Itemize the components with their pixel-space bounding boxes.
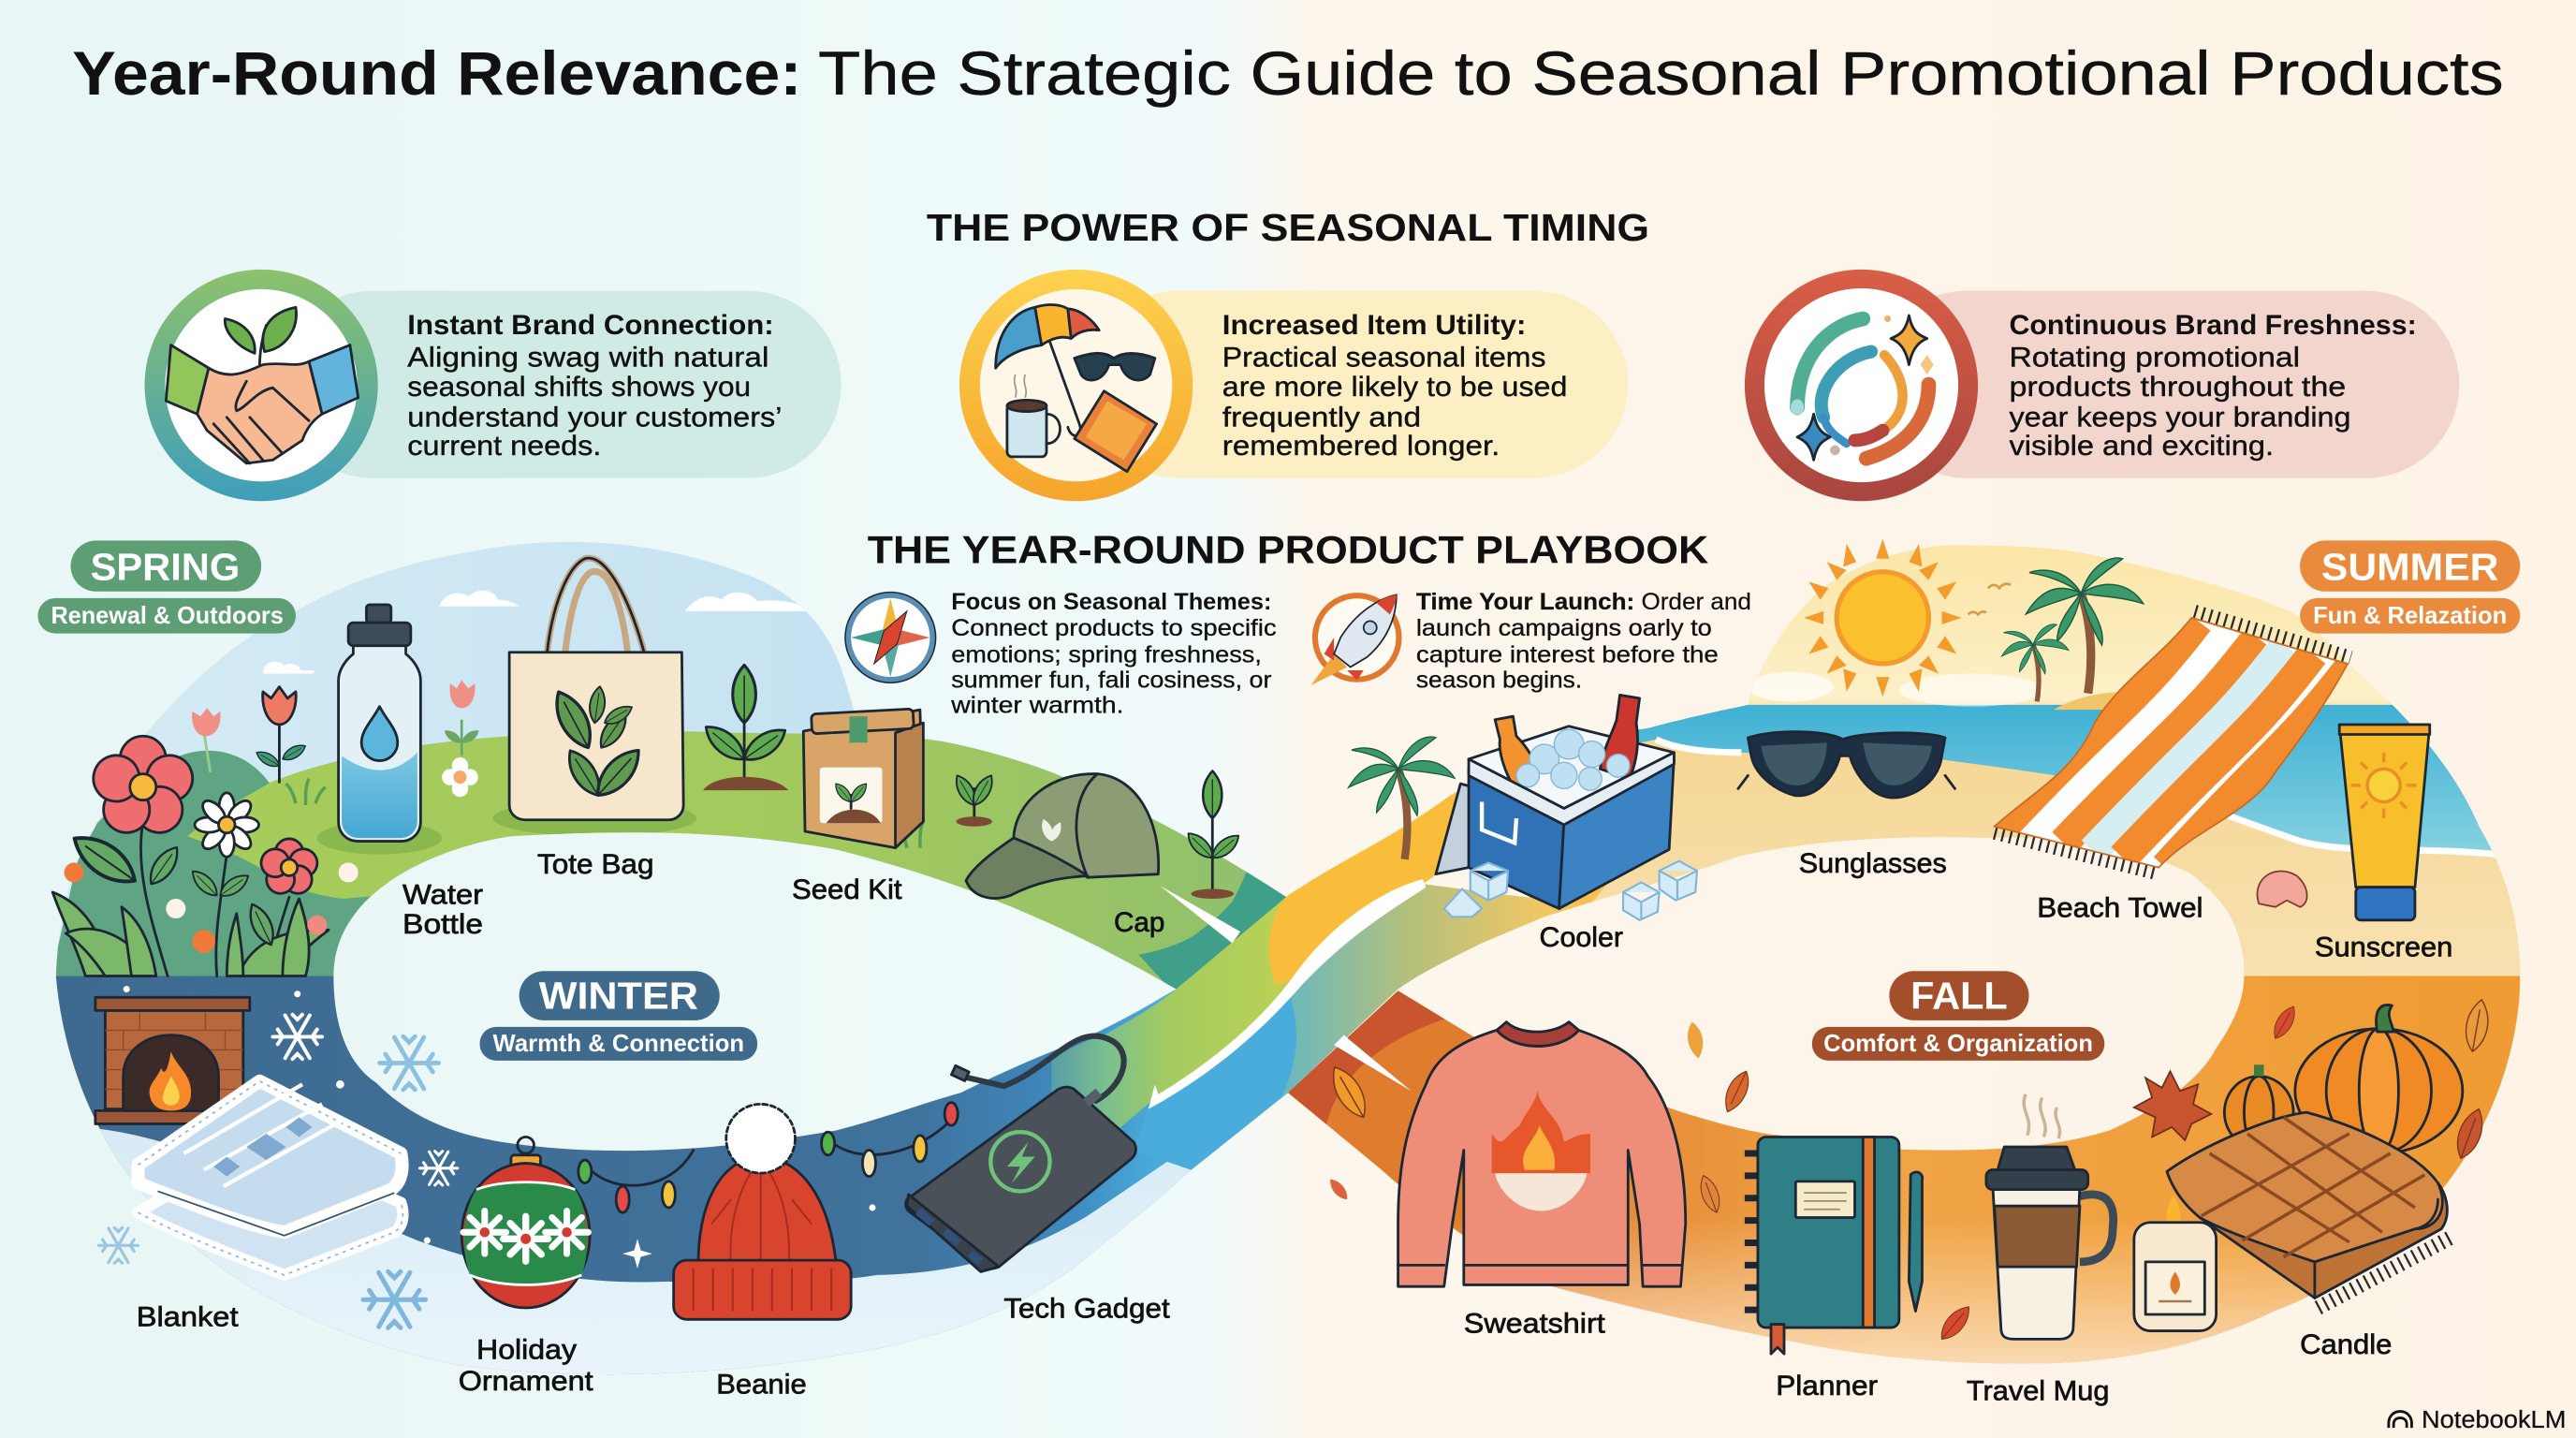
product labels: fall: Sweatshirt	[1464, 1308, 1605, 1339]
product labels: summer: Sunscreen	[2315, 932, 2452, 962]
season tag: winter	[480, 971, 757, 1061]
text block: instant brand connection: Instant Brand Connection:	[407, 310, 774, 341]
text block: continuous brand freshness: Rotating promotional	[2009, 342, 2300, 373]
string lights right	[822, 1103, 958, 1177]
text block: focus on seasonal themes: Connect products to specific	[951, 616, 1277, 641]
product labels: summer	[1540, 848, 2452, 962]
icon: sunglasses	[1738, 732, 1955, 798]
arrow streak: spring band	[1160, 886, 1240, 943]
infinity crossing ribbon	[1051, 795, 1577, 1170]
season tag: winter: Warmth & Connection	[493, 1031, 744, 1057]
text block: continuous brand freshness	[2009, 310, 2417, 462]
icon: water bottle	[339, 605, 420, 842]
text block: time your launch: Time Your Launch: Order and	[1416, 590, 1751, 615]
text block: continuous brand freshness: products throughout the	[2009, 372, 2346, 403]
text block: focus on seasonal themes: summer fun, fali cosiness, or	[951, 668, 1271, 693]
season tag: winter: WINTER	[539, 975, 698, 1018]
season tag: summer: Fun & Relazation	[2313, 603, 2507, 629]
text block: increased item utility: Practical seasonal items	[1222, 342, 1546, 373]
icon: planner	[1751, 1137, 1923, 1354]
icon: travel mug with steam	[1986, 1094, 2114, 1339]
season tag: fall	[1812, 971, 2104, 1061]
text block: focus on seasonal themes	[950, 590, 1277, 719]
sapling right of cap	[1183, 770, 1243, 899]
tulips	[278, 723, 280, 782]
icon: handshake with sprout	[145, 270, 378, 501]
title	[72, 38, 2504, 108]
season tag: spring: Renewal & Outdoors	[51, 603, 284, 629]
text block: increased item utility: Increased Item Utility:	[1222, 310, 1526, 341]
product labels: fall	[1464, 1308, 2392, 1406]
product labels: winter: Holiday	[476, 1334, 577, 1365]
icon: seed kit	[803, 709, 923, 848]
icon: holiday ornament	[461, 1137, 590, 1308]
icon: sunscreen	[2339, 725, 2430, 920]
season tag: spring	[37, 540, 296, 634]
text block: focus on seasonal themes: winter warmth.	[950, 694, 1123, 719]
product labels: summer: Sunglasses	[1799, 848, 1947, 879]
text block: increased item utility: are more likely to be used	[1222, 372, 1567, 403]
heading: the year-round product playbook: THE YEAR-ROUND PRODUCT PLAYBOOK	[868, 528, 1709, 571]
tip: time your launch	[1311, 590, 1751, 693]
icon: tote bag	[509, 558, 683, 820]
product labels: fall: Planner	[1776, 1371, 1878, 1401]
icon: beach towel	[1995, 611, 2352, 874]
season tag: fall: FALL	[1910, 975, 2008, 1018]
product labels: spring	[402, 849, 1164, 940]
icon: plaid blanket	[2167, 1112, 2454, 1308]
product labels: winter: Tech Gadget	[1003, 1294, 1170, 1325]
text block: increased item utility: remembered longer.	[1222, 431, 1500, 462]
panel: continuous brand freshness	[1745, 270, 2459, 501]
season tag: fall: Comfort & Organization	[1823, 1031, 2093, 1057]
heading: the power of seasonal timing: THE POWER OF SEASONAL TIMING	[927, 206, 1649, 249]
title: Year-Round Relevance:	[72, 38, 802, 108]
summer band scene	[1429, 534, 2563, 986]
season tag: summer	[2300, 540, 2520, 634]
winter band scene	[56, 976, 1288, 1374]
sapling small	[951, 772, 997, 827]
icon: fireplace	[95, 997, 250, 1123]
text block: time your launch: season begins.	[1416, 668, 1582, 693]
icon: beanie	[674, 1104, 851, 1319]
icon: sun	[1804, 539, 1962, 697]
text block: instant brand connection	[407, 310, 782, 462]
icon: cap	[966, 774, 1159, 898]
panel: instant brand connection	[145, 270, 842, 501]
icon: maple leaf	[2134, 1071, 2211, 1140]
arrow streak: fall band	[1334, 1035, 1412, 1091]
tip: focus on seasonal themes	[845, 590, 1277, 719]
product labels: winter: Ornament	[459, 1366, 593, 1397]
birds	[1969, 584, 2011, 614]
panel: increased item utility	[959, 270, 1628, 501]
text block: focus on seasonal themes: emotions; spring freshness,	[951, 642, 1262, 668]
text block: instant brand connection: Aligning swag with natural	[407, 342, 768, 373]
icon: rocket and clock	[1311, 594, 1398, 685]
icon: rotating arcs and sparkles	[1745, 270, 1978, 501]
text block: continuous brand freshness: year keeps your branding	[2009, 402, 2351, 433]
product labels: spring: Cap	[1114, 907, 1164, 938]
icon: folded winter blanket	[138, 1081, 402, 1275]
product labels: spring: Water	[402, 879, 483, 910]
icon: candle	[2134, 1195, 2217, 1331]
icon: sweatshirt	[1398, 1022, 1686, 1286]
product labels: summer: Cooler	[1540, 922, 1623, 953]
text block: time your launch: launch campaigns oarly to	[1416, 616, 1712, 641]
watermark: NotebookLM: NotebookLM	[2422, 1405, 2566, 1433]
product labels: summer: Beach Towel	[2037, 892, 2203, 923]
product labels: spring: Bottle	[402, 909, 483, 940]
product labels: spring: Seed Kit	[792, 874, 902, 905]
text block: time your launch: capture interest before the	[1416, 642, 1719, 668]
spring flowers	[52, 681, 481, 976]
autumn leaves scattered	[1325, 998, 2492, 1344]
text block: time your launch	[1416, 590, 1751, 693]
season tag: summer: SUMMER	[2321, 546, 2498, 589]
fall band scene	[1288, 976, 2520, 1364]
daisy	[195, 793, 258, 857]
text block: increased item utility	[1222, 310, 1567, 462]
product labels: fall: Candle	[2300, 1329, 2392, 1360]
big red flower	[87, 736, 198, 842]
icon: seashell	[2257, 871, 2307, 907]
spring band scene	[56, 542, 1286, 989]
product labels: spring: Tote Bag	[537, 849, 654, 880]
product labels: fall: Travel Mug	[1967, 1375, 2110, 1406]
text block: instant brand connection: seasonal shifts shows you	[407, 372, 751, 403]
arrow streak: ribbon flow	[1149, 879, 1426, 1109]
icon: pumpkins	[2224, 1005, 2463, 1153]
palm trees on beach	[2001, 558, 2144, 701]
icon: umbrella, sunglasses, mug and towel	[959, 270, 1193, 501]
icon: compass	[845, 593, 936, 682]
icon: palm tree left	[1349, 737, 1455, 859]
icon: cooler	[1436, 695, 1697, 920]
snowflakes	[98, 1015, 458, 1328]
product labels: winter: Blanket	[137, 1301, 239, 1332]
sapling with soil	[699, 665, 791, 790]
text block: increased item utility: frequently and	[1222, 402, 1421, 433]
text block: continuous brand freshness: Continuous Brand Freshness:	[2009, 310, 2417, 341]
small red flower	[257, 839, 321, 899]
text block: focus on seasonal themes: Focus on Seasonal Themes:	[951, 590, 1271, 615]
product labels: winter: Beanie	[716, 1369, 807, 1400]
product labels: winter	[137, 1294, 1170, 1400]
title: The Strategic Guide to Seasonal Promotional Products	[818, 38, 2504, 108]
season tag: spring: SPRING	[91, 546, 240, 589]
text block: instant brand connection: understand your customers’	[407, 402, 782, 433]
icon: tech gadget power bank	[906, 1036, 1135, 1271]
string lights left	[578, 1151, 694, 1212]
text block: instant brand connection: current needs.	[407, 431, 601, 462]
text block: continuous brand freshness: visible and exciting.	[2009, 431, 2274, 462]
